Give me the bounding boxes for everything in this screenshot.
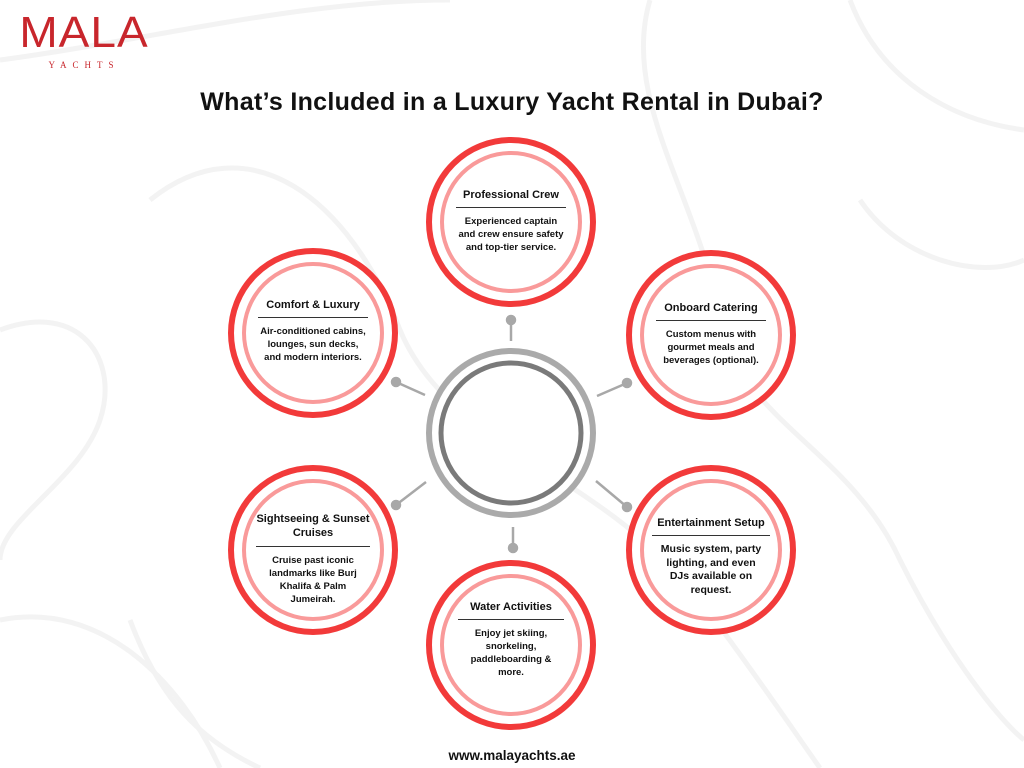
panel: water activities: Enjoy jet skiing, snorkeling, paddleboarding & more. xyxy=(471,628,551,678)
connectors xyxy=(392,316,631,552)
panel: sightseeing: Sightseeing & Sunset Cruises xyxy=(256,513,370,539)
panel: sightseeing xyxy=(256,513,370,605)
panel: professional crew: Professional Crew xyxy=(463,189,559,201)
panel: entertainment xyxy=(652,517,770,596)
footer url: www.malayachts.ae xyxy=(448,748,576,763)
logo: MALA xyxy=(19,7,149,57)
panel: sightseeing: Cruise past iconic landmarks like Burj Khalifa & Palm Jumeirah. xyxy=(269,555,357,605)
feature circles xyxy=(231,140,793,727)
panel: catering xyxy=(656,302,766,366)
panel: water activities: Water Activities xyxy=(470,601,552,613)
panel: catering: Onboard Catering xyxy=(664,302,758,314)
panel: water activities xyxy=(458,601,564,678)
panel: entertainment: Music system, party lighting, and even DJs available on request. xyxy=(661,543,761,596)
title: What’s Included in a Luxury Yacht Rental in Dubai? xyxy=(200,88,824,116)
logo: YACHTS xyxy=(48,60,120,70)
center circle xyxy=(429,351,593,515)
panel: professional crew: Experienced captain and crew ensure safety and top-tier service. xyxy=(458,216,564,253)
panel: catering: Custom menus with gourmet meals and beverages (optional). xyxy=(663,329,759,366)
panel: entertainment: Entertainment Setup xyxy=(657,517,765,529)
panel: comfort: Comfort & Luxury xyxy=(266,299,360,311)
panel: comfort xyxy=(258,299,368,363)
panel: professional crew xyxy=(456,189,566,253)
panel: comfort: Air-conditioned cabins, lounges, sun decks, and modern interiors. xyxy=(260,326,366,363)
